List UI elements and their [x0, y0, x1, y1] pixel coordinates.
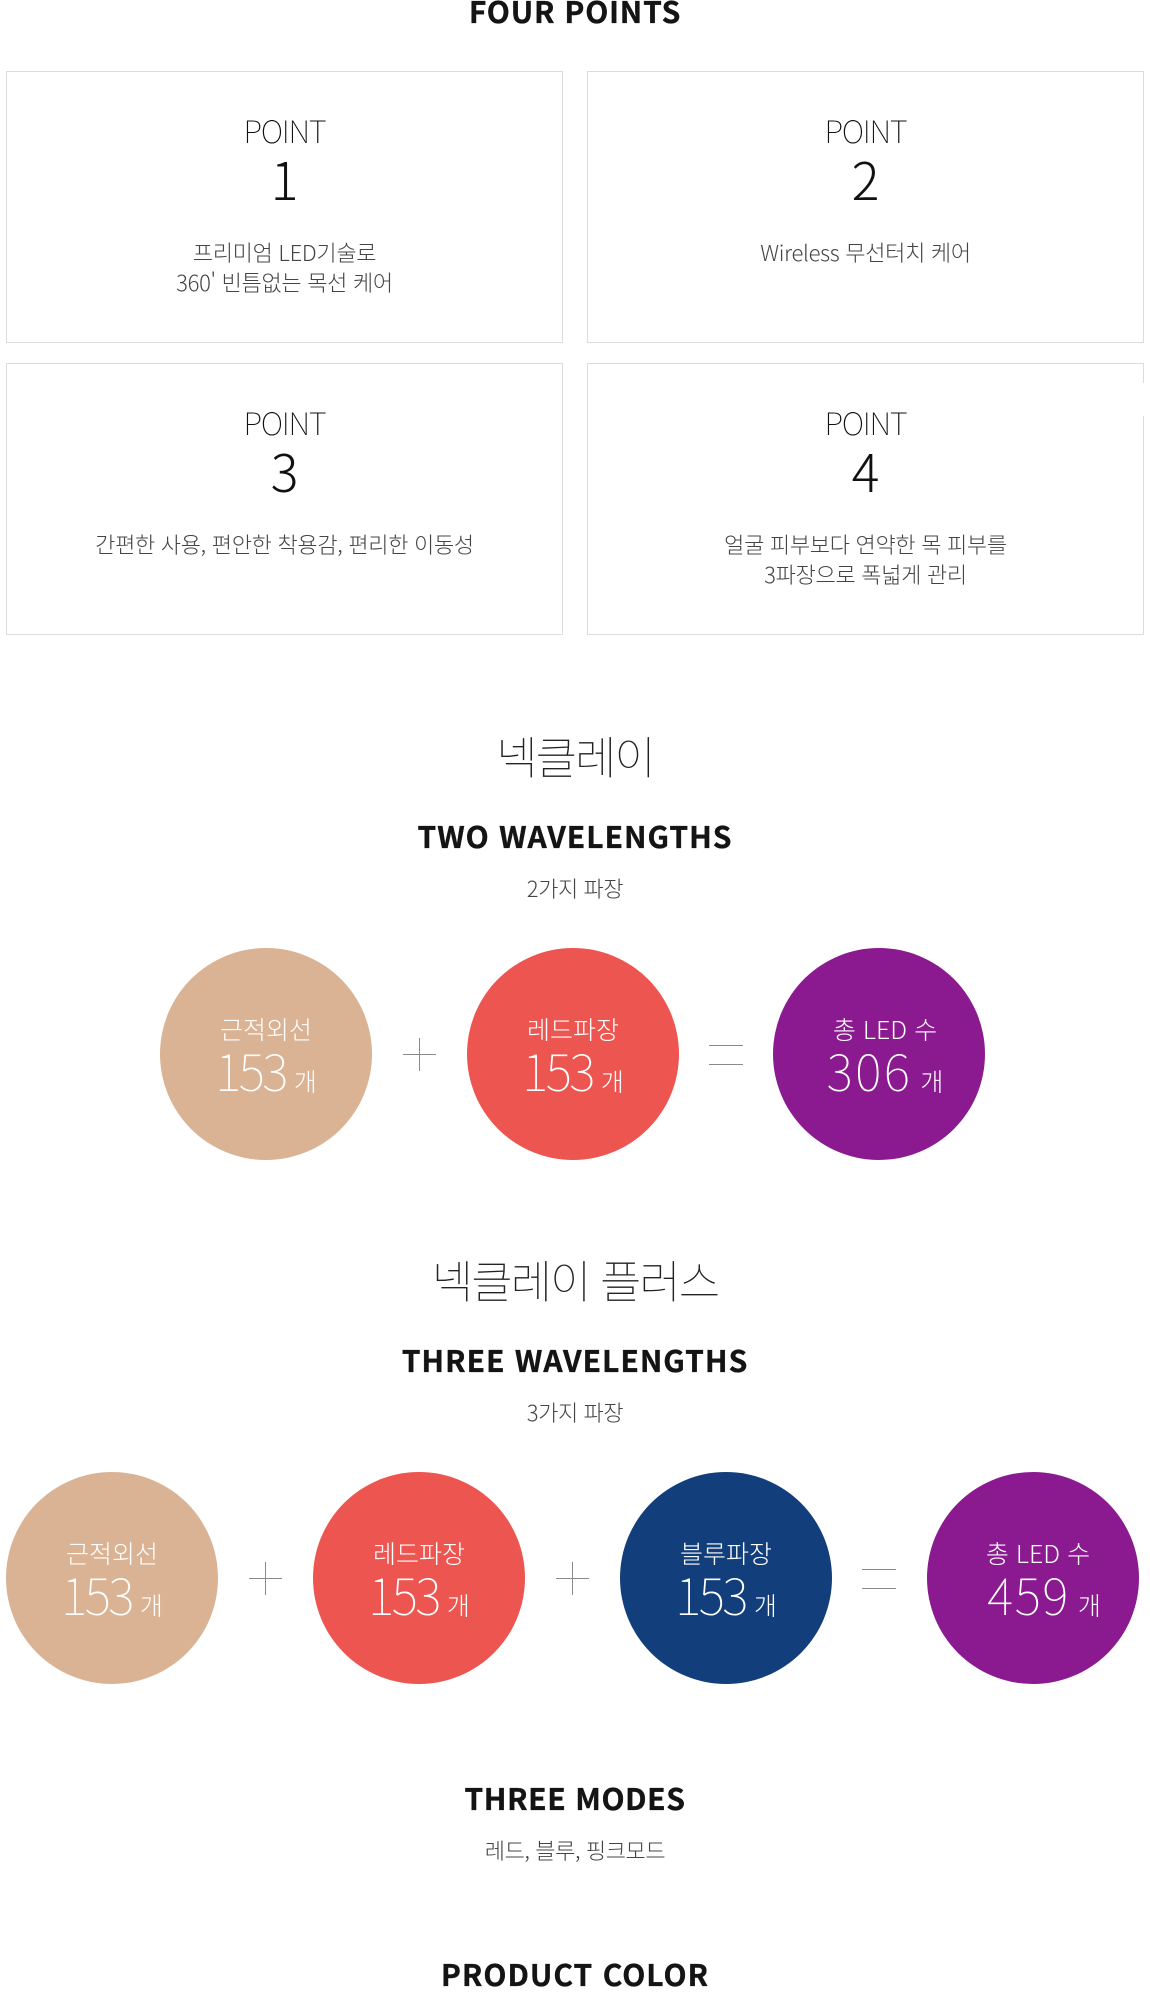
subheading: three modes: 레드, 블루, 핑크모드	[485, 1834, 665, 1866]
point 2 description: Wireless 무선터치 케어	[760, 236, 971, 268]
point 1 description: 360' 빈틈없는 목선 케어	[176, 266, 393, 298]
point label 1: POINT	[244, 107, 325, 152]
point number 4: 4	[852, 432, 879, 507]
count: 153 개	[675, 1558, 777, 1630]
icon: equals	[862, 1569, 896, 1589]
heading: necklay: 넥클레이	[496, 722, 654, 787]
point 3 description: 간편한 사용, 편안한 착용감, 편리한 이동성	[95, 528, 474, 560]
heading: three wavelengths: THREE WAVELENGTHS	[402, 1337, 748, 1381]
panel: point 3	[6, 363, 563, 635]
subheading: two wavelengths: 2가지 파장	[527, 872, 623, 904]
point 4 description	[724, 528, 1007, 590]
label: 근적외선	[220, 1011, 312, 1047]
circle: near infrared	[6, 1472, 218, 1684]
point number 2: 2	[852, 140, 879, 215]
point number 1: 1	[271, 140, 298, 215]
heading: three modes: THREE MODES	[464, 1775, 686, 1819]
heading: necklay plus: 넥클레이 플러스	[432, 1246, 718, 1311]
heading: product color: PRODUCT COLOR	[441, 1951, 709, 1995]
circle: near infrared	[160, 948, 372, 1160]
heading: two wavelengths: TWO WAVELENGTHS	[418, 813, 732, 857]
subheading: three wavelengths: 3가지 파장	[527, 1396, 623, 1428]
label: 블루파장	[680, 1535, 772, 1571]
point 1 description	[176, 236, 393, 298]
count: 153 개	[368, 1558, 470, 1630]
count: 153 개	[61, 1558, 163, 1630]
count: 459 개	[987, 1558, 1101, 1630]
point number 3: 3	[271, 432, 298, 507]
circle: red wavelength	[313, 1472, 525, 1684]
icon: plus	[249, 1562, 282, 1595]
count: 153 개	[522, 1034, 624, 1106]
panel: point 4	[587, 363, 1144, 635]
label: 레드파장	[373, 1535, 465, 1571]
circle: red wavelength	[467, 948, 679, 1160]
circle: total LED	[773, 948, 985, 1160]
panel: point 2	[587, 71, 1144, 343]
circle: blue wavelength	[620, 1472, 832, 1684]
count: 306 개	[827, 1034, 943, 1106]
circle: total LED	[927, 1472, 1139, 1684]
label: 총 LED 수	[833, 1011, 937, 1047]
icon: plus	[403, 1038, 436, 1071]
point 1 description: 프리미엄 LED기술로	[193, 236, 376, 268]
label: 총 LED 수	[986, 1535, 1090, 1571]
point label 3: POINT	[244, 399, 325, 444]
label: 근적외선	[66, 1535, 158, 1571]
label: 레드파장	[527, 1011, 619, 1047]
point label 2: POINT	[824, 107, 906, 152]
point 4 description: 3파장으로 폭넓게 관리	[764, 558, 967, 590]
count: 153 개	[215, 1034, 317, 1106]
icon: plus	[556, 1562, 589, 1595]
point label 4: POINT	[824, 399, 906, 444]
panel: point 1	[6, 71, 563, 343]
icon: equals	[709, 1045, 743, 1065]
point 4 description: 얼굴 피부보다 연약한 목 피부를	[724, 528, 1007, 560]
